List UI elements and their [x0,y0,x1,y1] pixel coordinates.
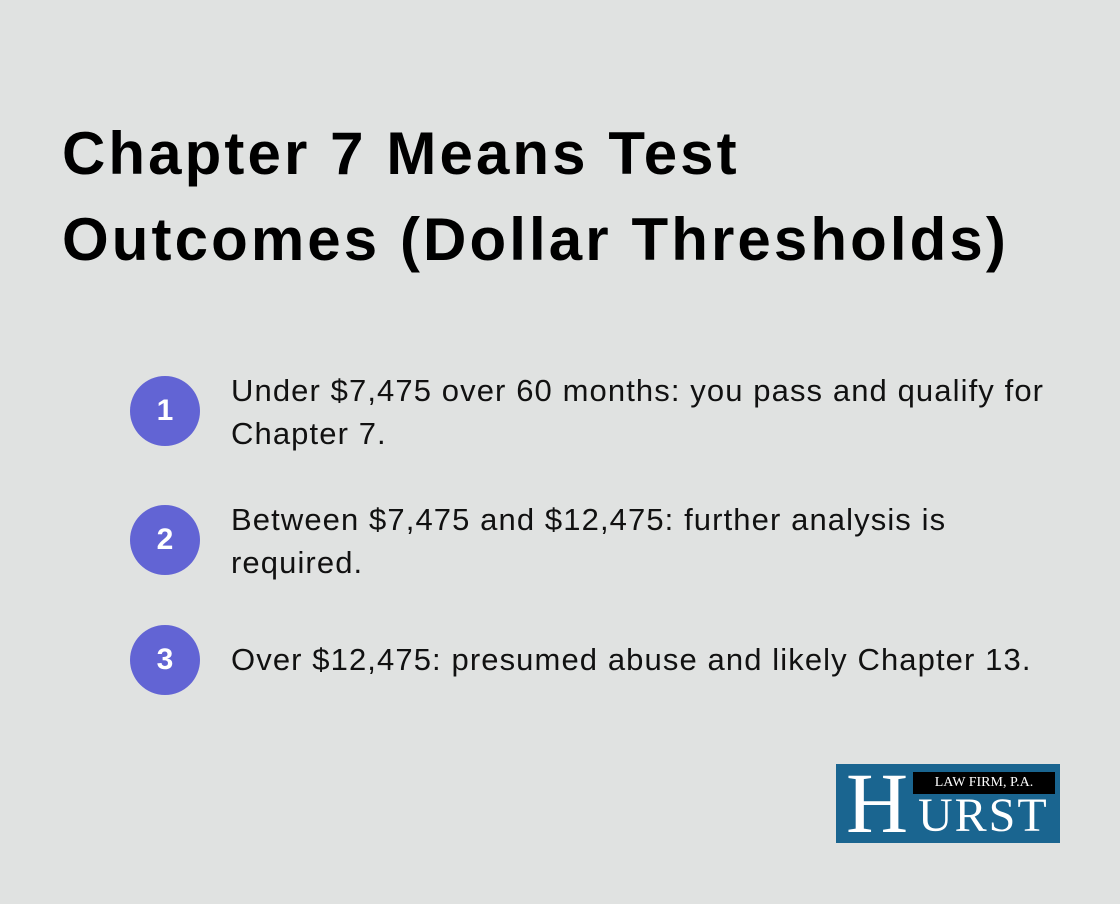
title [62,120,1009,273]
text 3: Over $12,475: presumed abuse and likely Chapter 13. [231,642,1032,677]
title: Outcomes (Dollar Thresholds) [62,206,1009,273]
item 1 [130,373,1044,451]
text 1 [231,373,1044,451]
icon: number 2 [130,505,200,575]
logo: LAW FIRM, P.A. [935,775,1033,790]
logo [836,764,1060,843]
icon: number 3: 3 [157,643,173,676]
logo: URST [918,789,1049,842]
icon: number 1: 1 [157,394,173,427]
icon: number 1 [130,376,200,446]
text 2: required. [231,545,363,580]
title: Chapter 7 Means Test [62,120,740,187]
text 1: Chapter 7. [231,416,387,451]
icon: number 2: 2 [157,523,173,556]
item 3 [130,625,1032,695]
icon: number 3 [130,625,200,695]
text 1: Under $7,475 over 60 months: you pass and qualify for [231,373,1044,408]
text 2 [231,502,946,580]
item 2 [130,502,946,580]
text 2: Between $7,475 and $12,475: further analysis is [231,502,946,537]
